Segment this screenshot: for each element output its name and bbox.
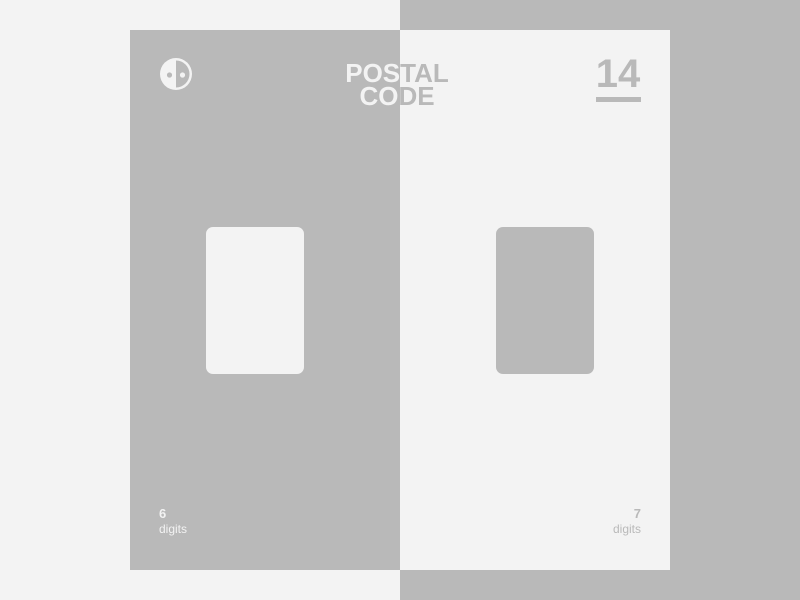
title: POSTAL xyxy=(345,58,449,88)
title xyxy=(347,64,448,106)
right label: 7 xyxy=(634,506,641,521)
right label xyxy=(613,506,641,536)
card xyxy=(130,30,670,570)
title: CODE xyxy=(359,81,435,111)
left rectangle xyxy=(206,227,304,374)
title: CODE xyxy=(359,81,435,111)
left label: 6 xyxy=(159,506,166,521)
right rectangle xyxy=(496,227,594,374)
left label: digits xyxy=(159,522,187,536)
left label xyxy=(159,506,187,536)
number badge: 14 xyxy=(596,52,640,96)
icon: logo xyxy=(160,58,192,90)
right label: digits xyxy=(613,522,641,536)
title: POSTAL xyxy=(345,58,449,88)
